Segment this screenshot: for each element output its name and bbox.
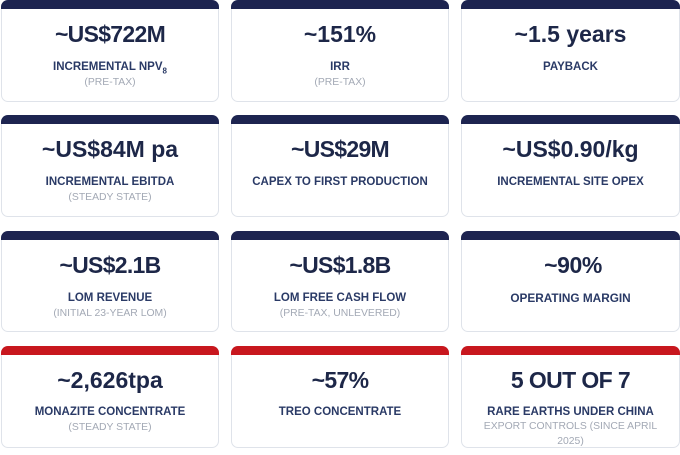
value: payback: ~1.5 years (515, 21, 626, 47)
card: payback (461, 0, 680, 102)
label: TREO: TREO CONCENTRATE (279, 406, 401, 418)
card: LOM revenue (1, 231, 219, 332)
note: LOM revenue: (INITIAL 23-YEAR LOM) (53, 308, 167, 319)
label: NPV: INCREMENTAL NPV8 (53, 60, 167, 75)
value: operating margin: ~90% (544, 252, 602, 278)
value: site opex: ~US$0.90/kg (502, 136, 639, 162)
note: monazite: (STEADY STATE) (68, 422, 152, 433)
value: monazite: ~2,626tpa (57, 367, 163, 393)
note: rare earths (484, 421, 657, 446)
card: capex (231, 115, 449, 217)
card: site opex (461, 115, 680, 217)
card: TREO concentrate (231, 346, 449, 448)
value: IRR: ~151% (304, 21, 376, 47)
note: NPV: (PRE-TAX) (84, 77, 136, 88)
label: rare earths: RARE EARTHS UNDER CHINA (487, 406, 654, 418)
card: rare earths (461, 346, 680, 448)
note: rare earths: 2025) (557, 436, 584, 446)
label: site opex: INCREMENTAL SITE OPEX (497, 176, 644, 188)
card: IRR (231, 0, 449, 102)
card: incremental NPV (1, 0, 219, 102)
card: monazite concentrate (1, 346, 219, 448)
label: free cash flow: LOM FREE CASH FLOW (274, 292, 406, 304)
value: capex: ~US$29M (291, 136, 389, 162)
label: payback: PAYBACK (543, 60, 598, 72)
value: TREO: ~57% (312, 367, 368, 393)
card: operating margin (461, 231, 680, 332)
note: EBITDA: (STEADY STATE) (68, 192, 152, 203)
label: LOM revenue: LOM REVENUE (68, 292, 152, 304)
note: rare earths: EXPORT CONTROLS (SINCE APRIL (484, 421, 657, 432)
label: operating margin: OPERATING MARGIN (510, 290, 631, 304)
label: capex: CAPEX TO FIRST PRODUCTION (252, 176, 428, 188)
value: LOM revenue: ~US$2.1B (59, 252, 161, 278)
value: rare earths: 5 OUT OF 7 (511, 367, 630, 393)
label: IRR: IRR (330, 60, 350, 72)
value: free cash flow: ~US$1.8B (289, 252, 391, 278)
value: NPV: ~US$722M (55, 21, 165, 47)
label: EBITDA: INCREMENTAL EBITDA (46, 176, 174, 188)
card: free cash flow (231, 231, 449, 332)
label: monazite: MONAZITE CONCENTRATE (35, 406, 185, 418)
card: EBITDA (1, 115, 219, 217)
value: EBITDA: ~US$84M pa (42, 136, 178, 162)
note: free cash flow: (PRE-TAX, UNLEVERED) (280, 308, 400, 319)
note: IRR: (PRE-TAX) (314, 77, 366, 88)
